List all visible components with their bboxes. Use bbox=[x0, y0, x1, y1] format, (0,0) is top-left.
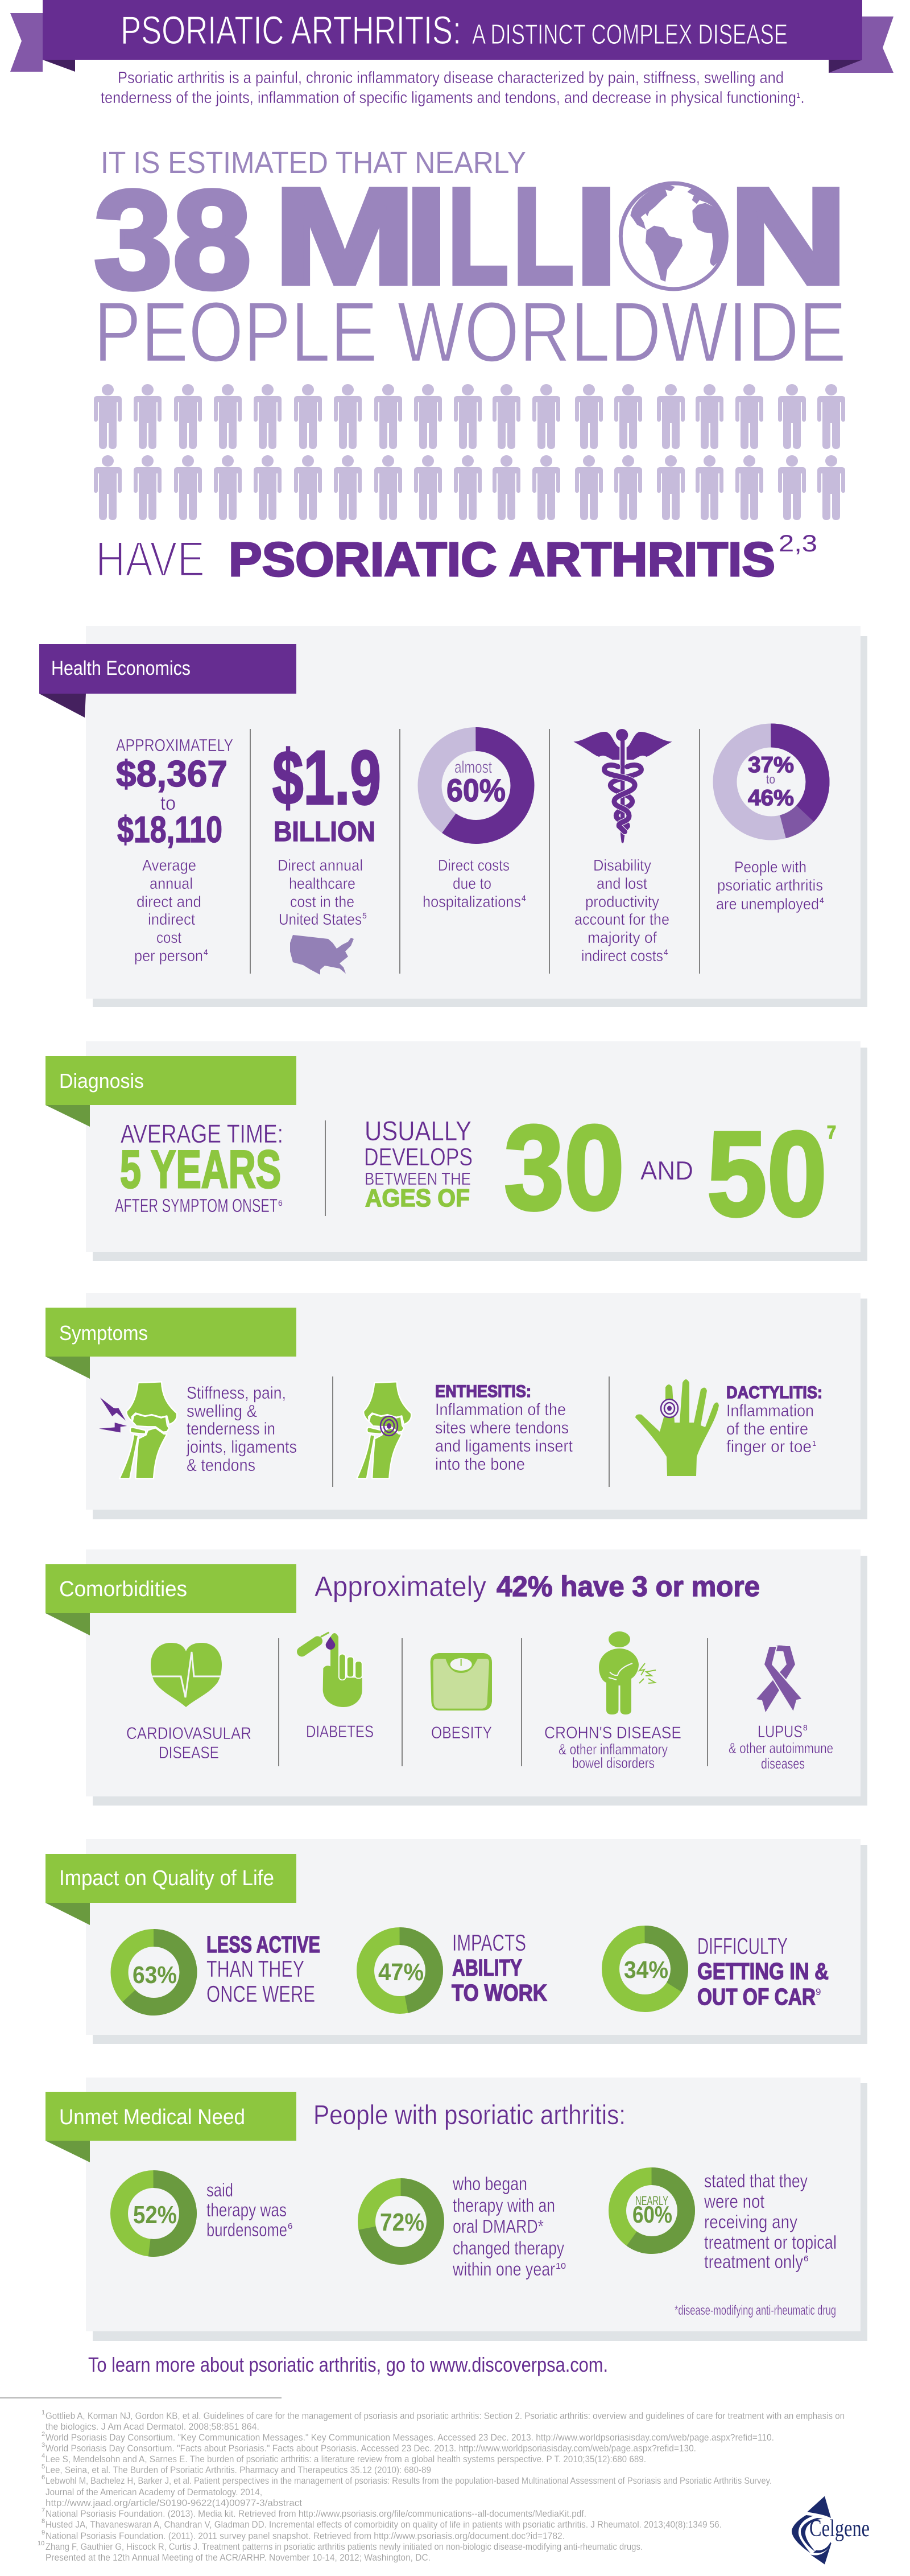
references: 6 bbox=[42, 2474, 45, 2481]
symptom: dactylitis bbox=[635, 1379, 822, 1476]
donut chart: nearly 60 percent untreated bbox=[618, 2170, 837, 2272]
stat: age of onset: 30 bbox=[504, 1100, 624, 1235]
panel: unmet medical need bbox=[46, 2078, 867, 2341]
headline: 38 million worldwide: N bbox=[729, 160, 847, 312]
headline: 38 million worldwide: L bbox=[448, 160, 508, 312]
stat: cost per person: $18,110 bbox=[117, 809, 222, 850]
donut chart: almost 60 percent: due to bbox=[453, 875, 491, 892]
heading: approximately 42 percent bbox=[315, 1571, 760, 1602]
stat: disability and caduceus icon: account for the bbox=[574, 910, 669, 928]
references: 2 bbox=[42, 2431, 45, 2438]
stat: 1.9 billion bbox=[272, 735, 381, 975]
headline: have psoriatic arthritis: 2,3 bbox=[779, 530, 817, 557]
comorbidity: crohn's disease: & other inflammatory bbox=[559, 1741, 668, 1758]
comorbidity: lupus: 8 bbox=[803, 1723, 808, 1732]
donut chart: nearly 60 percent untreated: treatment or topical bbox=[704, 2232, 837, 2253]
headline: 38 million worldwide: L bbox=[513, 160, 574, 312]
stat: cost per person: annual bbox=[150, 875, 193, 892]
donut chart: 63 percent less active bbox=[119, 1931, 320, 2007]
symptom: stiffness and pain: tenderness in bbox=[187, 1419, 275, 1439]
icon: joint with lightning bolts bbox=[99, 1382, 177, 1478]
stat: 1.9 billion: cost in the bbox=[290, 893, 354, 910]
donut chart: nearly 60 percent untreated: 6 bbox=[804, 2254, 808, 2264]
donut chart: unemployed 37 to 46 percent: are unemployed bbox=[716, 895, 819, 913]
intro paragraph: 1 bbox=[796, 91, 800, 100]
stat: age of onset: BETWEEN THE bbox=[365, 1169, 471, 1189]
stat: age of onset: 7 bbox=[827, 1122, 836, 1143]
references: Zhang F, Gauthier G, Hiscock R, Curtis J. Treatment patterns in psoriatic arthritis patients newly initiated on non-biologic disease-modifying anti-rheumatic drugs. bbox=[46, 2541, 643, 2552]
icon: united states map bbox=[290, 935, 354, 975]
panel: comorbidities bbox=[46, 1549, 867, 1806]
references: 7 bbox=[42, 2507, 45, 2514]
symptom: dactylitis: finger or toe bbox=[726, 1437, 812, 1456]
stat: age of onset: AGES OF bbox=[365, 1184, 470, 1212]
references: 3 bbox=[42, 2442, 45, 2449]
panel: impact on quality of life bbox=[46, 1839, 867, 2044]
title banner: A DISTINCT COMPLEX DISEASE bbox=[472, 19, 788, 50]
comorbidity: cardiovascular disease: CARDIOVASULAR bbox=[126, 1724, 251, 1743]
symptom: enthesitis: into the bone bbox=[435, 1455, 525, 1474]
donut chart: unemployed 37 to 46 percent: 37% bbox=[748, 753, 794, 777]
headline: have psoriatic arthritis bbox=[96, 530, 817, 587]
panel: health economics bbox=[39, 626, 867, 1007]
stat: 1.9 billion: $1.9 bbox=[272, 735, 381, 821]
donut chart: 52 percent burdensome bbox=[119, 2179, 292, 2248]
stat: average time to diagnosis: 5 YEARS bbox=[120, 1139, 281, 1199]
donut chart: 34 percent difficulty getting in and out of car: GETTING IN & bbox=[697, 1958, 829, 1984]
comorbidity: crohn's disease: CROHN'S DISEASE bbox=[544, 1724, 681, 1742]
donut chart: 34 percent difficulty getting in and out of car bbox=[611, 1933, 829, 2010]
stat: 1.9 billion: BILLION bbox=[274, 817, 375, 847]
section ribbon: health economics: Health Economics bbox=[51, 657, 191, 679]
section ribbon: symptoms: Symptoms bbox=[59, 1321, 148, 1345]
symptom: dactylitis: DACTYLITIS: bbox=[726, 1383, 822, 1402]
icon: awareness ribbon bbox=[756, 1646, 803, 1712]
references: Presented at the 12th Annual Meeting of the ACR/ARHP. November 10-14, 2012; Washington, DC. bbox=[46, 2552, 431, 2563]
stat: disability and caduceus icon: and lost bbox=[597, 875, 647, 892]
stat: 1.9 billion: 5 bbox=[362, 911, 367, 920]
stat: cost per person: $8,367 bbox=[116, 753, 228, 794]
section ribbon: impact on quality of life: Impact on Quality of Life bbox=[59, 1866, 274, 1890]
stat: disability and caduceus icon: Disability bbox=[593, 856, 651, 874]
stat: average time to diagnosis bbox=[115, 1119, 283, 1216]
symptom: enthesitis: Inflammation of the bbox=[435, 1400, 566, 1419]
stat: cost per person bbox=[116, 735, 233, 965]
stat: cost per person: Average bbox=[142, 856, 196, 874]
symptom: enthesitis: sites where tendons bbox=[435, 1419, 569, 1437]
donut chart: nearly 60 percent untreated: 60% bbox=[632, 2201, 672, 2228]
heading: people with psoriatic arthritis: People with psoriatic arthritis: bbox=[313, 2100, 626, 2130]
symptom: stiffness and pain: joints, ligaments bbox=[186, 1437, 297, 1457]
title banner: PSORIATIC ARTHRITIS: bbox=[121, 8, 461, 52]
symptom: stiffness and pain: Stiffness, pain, bbox=[187, 1383, 286, 1403]
references: Lee, Seina, et al. The Burden of Psoriatic Arthritis. Pharmacy and Therapeutics 35.12 (2010): 680-89 bbox=[46, 2464, 431, 2475]
donut chart: almost 60 percent: Direct costs bbox=[438, 856, 510, 874]
donut chart: 52 percent burdensome: 6 bbox=[288, 2221, 292, 2231]
donut chart: 72 percent changed therapy: therapy with an bbox=[453, 2195, 555, 2216]
donut chart: nearly 60 percent untreated: treatment only bbox=[704, 2251, 803, 2272]
stat: cost per person: per person bbox=[134, 947, 203, 965]
headline: 38 million worldwide: M bbox=[274, 160, 416, 312]
symptom: dactylitis: Inflammation bbox=[726, 1402, 814, 1420]
stat: disability and caduceus icon: productivity bbox=[585, 893, 659, 910]
comorbidity: cardiovascular disease bbox=[126, 1643, 251, 1762]
donut chart: 72 percent changed therapy: 10 bbox=[556, 2261, 566, 2271]
symptom: stiffness and pain: swelling & bbox=[187, 1401, 257, 1421]
icon: heart with pulse line bbox=[151, 1643, 222, 1707]
comorbidity: cardiovascular disease: DISEASE bbox=[159, 1744, 219, 1762]
donut chart: 47 percent impacts ability to work: ABILITY bbox=[452, 1955, 522, 1981]
donut chart: nearly 60 percent untreated: stated that they bbox=[704, 2170, 808, 2191]
symptom: enthesitis bbox=[357, 1382, 573, 1478]
references: 5 bbox=[42, 2463, 45, 2470]
comorbidity: diabetes: DIABETES bbox=[306, 1722, 374, 1741]
comorbidity: lupus: & other autoimmune bbox=[729, 1740, 833, 1757]
references: 8 bbox=[42, 2518, 45, 2525]
heading: approximately 42 percent: Approximately bbox=[315, 1571, 486, 1602]
donut chart: 52 percent burdensome: 52% bbox=[133, 2201, 177, 2229]
donut chart: unemployed 37 to 46 percent: to bbox=[766, 772, 775, 786]
stat: average time to diagnosis: 6 bbox=[278, 1198, 283, 1207]
stat: cost per person: indirect bbox=[148, 910, 195, 928]
references: http://www.jaad.org/article/S0190-9622(14)00977-3/abstract bbox=[46, 2497, 302, 2508]
donut chart: unemployed 37 to 46 percent: psoriatic arthritis bbox=[717, 876, 823, 894]
headline: 38 million worldwide bbox=[94, 146, 847, 380]
icon: bathroom scale bbox=[431, 1653, 492, 1711]
stat: disability and caduceus icon bbox=[573, 729, 672, 965]
intro paragraph bbox=[101, 69, 805, 107]
section ribbon: diagnosis: Diagnosis bbox=[59, 1069, 144, 1093]
logo: celgene bbox=[792, 2496, 870, 2565]
donut chart: 63 percent less active: THAN THEY bbox=[206, 1956, 304, 1982]
references: Lee S, Mendelsohn and A, Sarnes E. The burden of psoriatic arthritis: a literature review from a global health systems perspective. P T. 2010;35(12):680 689. bbox=[46, 2454, 646, 2464]
donut chart: 47 percent impacts ability to work: 47% bbox=[378, 1959, 424, 1986]
references: 4 bbox=[42, 2453, 45, 2459]
symptom: stiffness and pain bbox=[99, 1382, 297, 1478]
donut chart: 34 percent difficulty getting in and out of car: 34% bbox=[624, 1956, 668, 1984]
intro paragraph: tenderness of the joints, inflammation of specific ligaments and tendons, and decrease in physical functioning bbox=[101, 89, 796, 107]
stat: cost per person: to bbox=[160, 793, 176, 814]
donut chart: 72 percent changed therapy: within one year bbox=[452, 2258, 555, 2280]
stat: cost per person: APPROXIMATELY bbox=[116, 735, 233, 755]
references: Husted JA, Thavaneswaran A, Chandran V, Gladman DD. Incremental effects of comorbidity on quality of life in patients with psoriatic arthritis. J Rheumatol. 2013;40(8):1349 56. bbox=[46, 2519, 722, 2530]
donut chart: 34 percent difficulty getting in and out of car: 9 bbox=[816, 1986, 821, 1997]
logo: celgene: Celgene bbox=[809, 2516, 870, 2542]
section ribbon: symptoms bbox=[46, 1308, 296, 1379]
stat: average time to diagnosis: AVERAGE TIME: bbox=[121, 1119, 283, 1148]
donut chart: almost 60 percent: 4 bbox=[522, 893, 526, 902]
donut chart: unemployed 37 to 46 percent: 46% bbox=[748, 786, 794, 810]
donut chart: almost 60 percent: hospitalizations bbox=[423, 893, 521, 910]
headline: 38 million worldwide: I bbox=[405, 160, 448, 312]
donut chart: 72 percent changed therapy: changed therapy bbox=[453, 2237, 564, 2258]
donut chart: 47 percent impacts ability to work bbox=[365, 1930, 547, 2006]
stat: age of onset: AND bbox=[640, 1156, 693, 1185]
heading: approximately 42 percent: 42% have 3 or more bbox=[497, 1571, 760, 1602]
section ribbon: impact on quality of life bbox=[46, 1854, 296, 1925]
comorbidity: obesity: OBESITY bbox=[431, 1724, 492, 1742]
symptom: dactylitis: of the entire bbox=[726, 1420, 808, 1439]
donut chart: unemployed 37 to 46 percent: 4 bbox=[820, 896, 824, 905]
donut chart: 63 percent less active: 63% bbox=[133, 1961, 177, 1989]
symptom: enthesitis: and ligaments insert bbox=[435, 1437, 573, 1456]
headline: 38 million worldwide: 38 bbox=[94, 162, 251, 318]
intro paragraph: Psoriatic arthritis is a painful, chronic inflammatory disease characterized by pain, stiffness, swelling and bbox=[118, 69, 784, 87]
stat: disability and caduceus icon: indirect costs bbox=[581, 947, 663, 965]
donut chart: 63 percent less active: LESS ACTIVE bbox=[206, 1931, 320, 1957]
comorbidity: lupus bbox=[729, 1646, 833, 1772]
section ribbon: comorbidities: Comorbidities bbox=[59, 1577, 187, 1601]
references: 9 bbox=[42, 2529, 45, 2536]
stat: cost per person: cost bbox=[156, 929, 181, 946]
intro paragraph: . bbox=[800, 89, 805, 107]
donut chart: 34 percent difficulty getting in and out of car: DIFFICULTY bbox=[697, 1933, 788, 1959]
stat: disability and caduceus icon: majority of bbox=[588, 929, 657, 946]
stat: age of onset: DEVELOPS bbox=[364, 1143, 473, 1171]
donut chart: 47 percent impacts ability to work: IMPACTS bbox=[452, 1930, 526, 1956]
section ribbon: unmet medical need: Unmet Medical Need bbox=[59, 2105, 245, 2129]
references: Lebwohl M, Bachelez H, Barker J, et al. Patient perspectives in the management of psoriasis: Results from the population-based Multinational Assessment of Psoriasis and Psoriatic Arthritis Survey. bbox=[46, 2475, 772, 2486]
donut chart: 72 percent changed therapy bbox=[366, 2173, 566, 2280]
panel: diagnosis bbox=[46, 1041, 867, 1261]
comorbidity: obesity bbox=[431, 1653, 492, 1742]
stat: age of onset: 50 bbox=[707, 1106, 827, 1241]
donut chart: 72 percent changed therapy: 72% bbox=[380, 2208, 424, 2236]
section ribbon: health economics bbox=[39, 644, 296, 718]
comorbidity: lupus: diseases bbox=[761, 1755, 805, 1772]
donut chart: nearly 60 percent untreated: receiving any bbox=[704, 2211, 797, 2232]
comorbidity: lupus: LUPUS bbox=[758, 1722, 803, 1741]
donut chart: 63 percent less active: ONCE WERE bbox=[206, 1981, 315, 2007]
stat: cost per person: 4 bbox=[204, 947, 208, 957]
stat: age of onset: USUALLY bbox=[365, 1116, 471, 1147]
stat: average time to diagnosis: AFTER SYMPTOM ONSET bbox=[115, 1195, 278, 1216]
section ribbon: comorbidities bbox=[46, 1564, 296, 1635]
references: the biologics. J Am Acad Dermatol. 2008;58:851 864. bbox=[46, 2421, 259, 2432]
icon: finger prick bbox=[302, 1633, 362, 1707]
donut chart: 47 percent impacts ability to work: TO WORK bbox=[452, 1980, 547, 2006]
donut chart: nearly 60 percent untreated: were not bbox=[704, 2191, 764, 2212]
headline: 38 million worldwide: I bbox=[575, 160, 618, 312]
donut chart: almost 60 percent: almost bbox=[454, 758, 492, 777]
references: World Psoriasis Day Consortium. "Key Communication Messages." Key Communication Messages. Accessed 23 Dec. 2013. http://www.worldpsoriasisday.com/web/page.aspx?refid=110. bbox=[46, 2432, 774, 2443]
references: Journal of the American Academy of Dermatology. 2014, bbox=[46, 2487, 262, 2497]
headline: have psoriatic arthritis: HAVE bbox=[96, 532, 205, 587]
donut chart: unemployed 37 to 46 percent: People with bbox=[734, 858, 806, 876]
symptom: stiffness and pain: & tendons bbox=[187, 1455, 255, 1475]
stat: 1.9 billion: Direct annual bbox=[278, 856, 363, 874]
donut chart: unemployed 37 to 46 percent bbox=[716, 735, 824, 913]
comorbidity: diabetes bbox=[302, 1633, 374, 1741]
section ribbon: diagnosis bbox=[46, 1056, 296, 1127]
donut chart: 52 percent burdensome: said bbox=[206, 2179, 233, 2200]
donut chart: almost 60 percent: 60% bbox=[446, 772, 506, 808]
stat: cost per person: direct and bbox=[136, 893, 201, 910]
stat: 1.9 billion: healthcare bbox=[289, 875, 355, 892]
stat: age of onset bbox=[364, 1100, 836, 1241]
donut chart: 72 percent changed therapy: who began bbox=[452, 2173, 527, 2194]
references: 10 bbox=[38, 2540, 44, 2547]
footnote: disease-modifying drug: *disease-modifying anti-rheumatic drug bbox=[675, 2303, 836, 2318]
title banner bbox=[10, 0, 894, 73]
donut chart: 34 percent difficulty getting in and out of car: OUT OF CAR bbox=[697, 1984, 816, 2010]
donut chart: almost 60 percent bbox=[423, 739, 526, 910]
donut chart: 72 percent changed therapy: oral DMARD* bbox=[453, 2216, 544, 2237]
headline: have psoriatic arthritis: PSORIATIC ARTHRITIS bbox=[229, 533, 775, 586]
donut chart: nearly 60 percent untreated: NEARLY bbox=[635, 2194, 668, 2208]
icon: person holding stomach bbox=[599, 1631, 656, 1714]
references: 1 bbox=[42, 2409, 45, 2416]
section ribbon: unmet medical need bbox=[46, 2092, 296, 2162]
stat: 1.9 billion: United States bbox=[279, 910, 362, 928]
pictogram: two rows of people bbox=[94, 384, 845, 520]
icon: globe bbox=[621, 183, 728, 289]
symptom: dactylitis: 1 bbox=[812, 1439, 816, 1448]
references: World Psoriasis Day Consortium. "Facts about Psoriasis." Facts about Psoriasis. Accessed 23 Dec. 2013. http://www.worldpsoriasisday.com/web/page.aspx?refid=130. bbox=[46, 2443, 696, 2454]
call to action: To learn more about psoriatic arthritis, go to www.discoverpsa.com. bbox=[88, 2353, 608, 2376]
headline: 38 million worldwide: IT IS ESTIMATED THAT NEARLY bbox=[101, 146, 526, 180]
icon: joint with target bbox=[357, 1382, 411, 1478]
references: National Psoriasis Foundation. (2013). Media kit. Retrieved from http://www.psoriasis.org/file/communications--all-documents/MediaKit.pdf. bbox=[46, 2508, 586, 2519]
stat: disability and caduceus icon: 4 bbox=[664, 947, 668, 957]
comorbidity: crohn's disease bbox=[544, 1631, 681, 1771]
panel: symptoms bbox=[46, 1293, 867, 1519]
comorbidity: crohn's disease: bowel disorders bbox=[572, 1754, 655, 1771]
icon: caduceus bbox=[573, 729, 672, 843]
donut chart: 52 percent burdensome: burdensome bbox=[206, 2219, 287, 2240]
references bbox=[0, 2398, 845, 2563]
donut chart: 52 percent burdensome: therapy was bbox=[206, 2199, 287, 2220]
symptom: enthesitis: ENTHESITIS: bbox=[435, 1382, 531, 1401]
icon: hand with target bbox=[635, 1379, 719, 1476]
references: National Psoriasis Foundation. (2011). 2011 survey panel snapshot. Retrieved from http://www.psoriasis.org/document.doc?id=1782. bbox=[46, 2530, 565, 2541]
